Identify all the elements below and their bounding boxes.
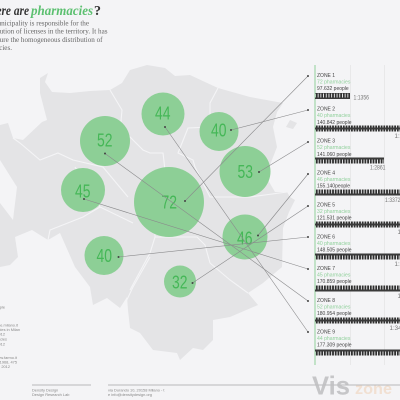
zone 1: 72 pharmacies [317, 80, 351, 86]
circle values: 46 [237, 228, 252, 248]
zone 8: ZONE 8 [317, 298, 335, 304]
intro text [0, 20, 108, 52]
zone 7 [315, 266, 400, 300]
zone 1: 1:1356 [354, 94, 369, 102]
circle values: 53 [238, 162, 253, 182]
zone 8: 180.954 people [317, 311, 352, 317]
chart axis [315, 65, 384, 365]
zone 6 [315, 234, 400, 268]
footer credits: Density Design [32, 388, 58, 392]
zone 3: ZONE 3 [317, 138, 335, 144]
circle: zone 9, 44 pharmacies [142, 92, 184, 136]
watermark [312, 370, 392, 400]
zone 9: ZONE 9 [317, 330, 335, 336]
zone 6: ZONE 6 [317, 234, 335, 240]
zone 7: 170.859 people [317, 279, 352, 285]
zone 9 [315, 330, 400, 356]
zone 5 [315, 202, 400, 236]
watermark: Vis [312, 370, 350, 400]
footer credits: e info@densitydesign.org [108, 392, 152, 397]
zone 9: 44 pharmacies [317, 336, 351, 342]
circle values: 52 [97, 130, 112, 150]
circle values: 40 [96, 246, 112, 266]
zone 7: 45 pharmacies [317, 272, 351, 278]
circle values: 45 [75, 182, 90, 202]
watermark: zone [355, 381, 392, 398]
side notes [0, 304, 20, 369]
circle: zone 6, 40 pharmacies [84, 236, 124, 275]
title: ? [94, 4, 101, 19]
map of Milan zones [0, 65, 297, 360]
circle values [75, 104, 253, 292]
circle: zone 8, 52 pharmacies [80, 116, 130, 166]
circle: zone 3, 53 pharmacies [220, 146, 270, 197]
circle: zone 2, 40 pharmacies [200, 112, 238, 151]
zone 1: 97.632 people [317, 86, 349, 92]
zone 4: 46 pharmacies [317, 177, 351, 183]
title: pharmacies [30, 4, 94, 19]
footer credits [32, 388, 165, 397]
zone 1 [315, 73, 369, 102]
zone 8 [315, 298, 400, 332]
zone 7: ZONE 7 [317, 266, 335, 272]
zone 5: 32 pharmacies [317, 209, 351, 215]
circle values: 32 [172, 272, 188, 292]
circle: zone 7, 45 pharmacies [61, 168, 105, 212]
zone 2: ZONE 2 [317, 106, 335, 112]
zone 2: 140.842 people [317, 120, 352, 126]
zone 5: ZONE 5 [317, 202, 335, 208]
zone 3 [315, 138, 386, 172]
zone 4: 155.140people [317, 184, 350, 190]
circle: zone 5, 32 pharmacies [164, 266, 196, 298]
circle: zone 4, 46 pharmacies [222, 214, 268, 260]
zone 3: 1:2861 [370, 164, 386, 172]
zone 2 [315, 106, 400, 140]
zone 8: 52 pharmacies [317, 304, 351, 310]
circle values: 72 [162, 192, 177, 212]
circle values: 44 [155, 104, 170, 124]
footer credits: via Durando 10, 20158 Milano - t [108, 388, 165, 392]
leader lines connecting circles to zones [83, 75, 309, 333]
zone 2: 40 pharmacies [317, 113, 351, 119]
zone 1: ZONE 1 [317, 73, 335, 79]
circle: zone 1, 72 pharmacies [134, 167, 204, 237]
zone 5: 121.531 people [317, 216, 352, 222]
footer credits: Design Research Lab [32, 392, 69, 397]
title [0, 4, 101, 19]
zone 6: 148.505 people [317, 248, 352, 254]
zone 4: ZONE 4 [317, 170, 335, 176]
circle values: 40 [211, 120, 226, 140]
zone 6: 40 pharmacies [317, 241, 351, 247]
zone 3: 52 pharmacies [317, 145, 351, 151]
zone 3: 141.060 people [317, 152, 352, 158]
zone 9: 177.309 people [317, 342, 352, 348]
zone 4 [315, 170, 400, 204]
footer rules [32, 384, 400, 386]
